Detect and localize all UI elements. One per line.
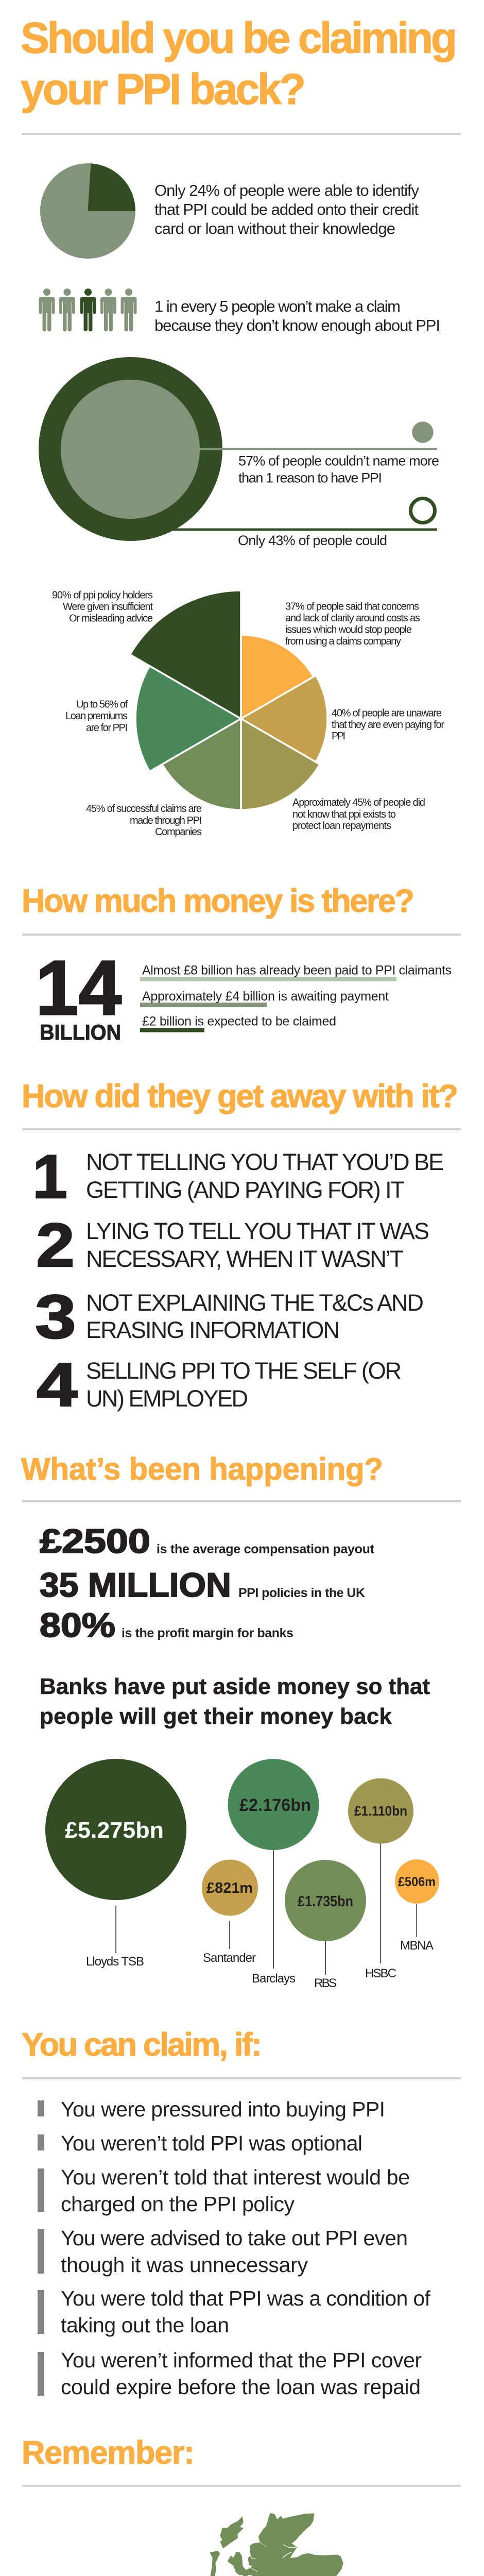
figure: 80%: 80% [40, 1606, 115, 1644]
label: approximately 45%: Approximately 45% of people did [292, 797, 425, 808]
item 4 [37, 1350, 402, 1419]
pie chart: 24% [40, 163, 135, 259]
rose chart [130, 590, 327, 810]
label: 37%: and lack of clarity around costs as [285, 613, 420, 624]
bar: £8 billion: Almost £8 billion has already been paid to PPI claimants [142, 963, 452, 978]
label: 37% [285, 601, 420, 647]
text: 1 in every 5: 1 in every 5 people won’t make a claim [154, 297, 401, 315]
heading: how did they get away: How did they get away with it? [22, 1078, 458, 1114]
text: only 24%: card or loan without their knowledge [154, 219, 395, 238]
bubble chart: bank provisions [45, 1759, 439, 1990]
bubble: HSBC [348, 1778, 413, 1980]
figure: 80%: is the profit margin for banks [122, 1626, 293, 1640]
bubble: Santander: £821m [206, 1880, 253, 1896]
bubble: Barclays: Barclays [252, 1972, 296, 1986]
item 4: UN) EMPLOYED [86, 1385, 248, 1412]
claim item 4 [38, 2226, 408, 2277]
label: 40%: PPI [332, 731, 345, 742]
text: 43%: Only 43% of people could [238, 533, 387, 548]
claim item 3: charged on the PPI policy [61, 2192, 295, 2216]
text: 57%: than 1 reason to have PPI [238, 470, 382, 485]
claim item 6 [38, 2348, 422, 2399]
text: 57%: 57% of people couldn’t name more [238, 453, 439, 469]
label: 40% [332, 708, 444, 742]
heading: what's been happening: What’s been happening? [21, 1452, 383, 1486]
chart: nested circles 57% and 43% [39, 357, 437, 541]
label: 90%: 90% of ppi policy holders [52, 589, 153, 601]
bubble: Barclays [228, 1759, 319, 1986]
label: 90%: Were given insufficient [63, 601, 153, 613]
bubble: Barclays: £2.176bn [239, 1795, 311, 1815]
item 1: 1 [32, 1142, 67, 1211]
title: Should you be claiming [21, 13, 457, 62]
item 3: ERASING INFORMATION [86, 1317, 340, 1343]
label: 56% [65, 699, 128, 734]
key figures [40, 1522, 375, 1644]
bar: £4 billion: Approximately £4 billion is awaiting payment [142, 989, 389, 1004]
claim item 3 [38, 2165, 410, 2216]
subheading: banks: people will get their money back [40, 1704, 392, 1729]
claim item 4: You were advised to take out PPI even [61, 2226, 408, 2250]
label: 45% of claims: Companies [155, 826, 202, 838]
label: approximately 45% [292, 797, 425, 832]
label: 40%: 40% of people are unaware [332, 708, 442, 719]
label: 37%: issues which would stop people [285, 624, 412, 636]
bubble: MBNA [395, 1859, 439, 1953]
subheading: banks: Banks have put aside money so that [40, 1674, 430, 1699]
bubble: MBNA: £506m [398, 1875, 436, 1889]
item 1: GETTING (AND PAYING FOR) IT [86, 1177, 405, 1203]
claim item 6: You weren’t informed that the PPI cover [61, 2348, 422, 2372]
bubble: Lloyds TSB [45, 1759, 186, 1969]
bar: £2 billion: £2 billion is expected to be claimed [142, 1014, 336, 1028]
map: United Kingdom with highlighted band [210, 2513, 343, 2576]
label: 90% [52, 589, 153, 624]
bubble: Santander [202, 1860, 258, 1965]
heading: how much money: How much money is there? [22, 883, 414, 919]
heading: remember: Remember: [22, 2435, 195, 2471]
item 2: NECESSARY, WHEN IT WASN’T [86, 1246, 404, 1272]
claim item 1: You were pressured into buying PPI [61, 2097, 385, 2121]
claim item 5: You were told that PPI was a condition of [61, 2286, 431, 2310]
label: 37%: from using a claims company [285, 636, 401, 647]
bubble: RBS: £1.735bn [298, 1893, 353, 1910]
item 2 [36, 1211, 429, 1280]
figure: 80% [40, 1606, 293, 1644]
claim item 6: could expire before the loan was repaid [61, 2375, 421, 2399]
subheading: banks [40, 1674, 430, 1729]
icon: five people, one highlighted [39, 289, 137, 331]
label: 56%: are for PPI [86, 722, 128, 734]
claim item 5: taking out the loan [61, 2313, 229, 2337]
bubble: Lloyds TSB: Lloyds TSB [86, 1955, 144, 1969]
heading: you can claim: You can claim, if: [22, 2027, 262, 2063]
text: only 24% [154, 181, 419, 238]
item 1: NOT TELLING YOU THAT YOU’D BE [86, 1149, 444, 1175]
label: 56%: Up to 56% of [76, 699, 128, 710]
panel: awareness statistics [39, 163, 440, 548]
label: 45% of claims: 45% of successful claims are [86, 803, 202, 815]
item 2: LYING TO TELL YOU THAT IT WAS [86, 1218, 429, 1244]
label: 45% of claims: made through PPI [130, 815, 202, 826]
bubble: HSBC: £1.110bn [354, 1803, 407, 1819]
label: 56%: Loan premiums [65, 710, 128, 722]
bubble: MBNA: MBNA [400, 1939, 434, 1953]
figure: 35 million: 35 MILLION [40, 1566, 231, 1604]
text: 1 in every 5 [154, 297, 440, 334]
title [21, 13, 457, 113]
item 4: SELLING PPI TO THE SELF (OR [86, 1358, 402, 1384]
text: only 24%: Only 24% of people were able to identify [154, 181, 419, 199]
item 1 [32, 1142, 444, 1211]
label: 37%: 37% of people said that concerns [285, 601, 419, 612]
item 3 [35, 1282, 424, 1351]
text: 57% [238, 453, 439, 485]
figure: £2500: is the average compensation payout [157, 1542, 375, 1556]
label: approximately 45%: not know that ppi exists to [292, 809, 396, 820]
bubble: RBS: RBS [314, 1976, 337, 1990]
bubble: HSBC: HSBC [365, 1967, 396, 1980]
claim item 5 [38, 2286, 431, 2337]
big number: 14 [36, 944, 122, 1031]
text: 1 in every 5: because they don’t know enough about PPI [154, 316, 440, 334]
claim item 4: though it was unnecessary [61, 2253, 308, 2277]
bubble: Lloyds TSB: £5.275bn [65, 1818, 164, 1843]
item 3: NOT EXPLAINING THE T&Cs AND [86, 1290, 424, 1316]
title: your PPI back? [21, 65, 306, 113]
panel: 14 billion [36, 944, 452, 1044]
rose chart labels [52, 589, 444, 838]
claim item 3: You weren’t told that interest would be [61, 2165, 410, 2189]
figure: 35 million [40, 1566, 365, 1604]
numbered list [32, 1142, 444, 1419]
figure: £2500: £2500 [40, 1522, 150, 1560]
item 3: 3 [35, 1282, 76, 1351]
figure: £2500 [40, 1522, 375, 1560]
label: 45% of claims [86, 803, 202, 838]
label: 90%: Or misleading advice [69, 613, 153, 624]
item 2: 2 [36, 1211, 75, 1280]
claim item 2: You weren’t told PPI was optional [61, 2131, 362, 2155]
bubble: Santander: Santander [203, 1951, 256, 1965]
big number: BILLION [40, 1020, 121, 1044]
item 4: 4 [37, 1350, 78, 1419]
figure: 35 million: PPI policies in the UK [238, 1586, 365, 1600]
claim list [38, 2097, 431, 2399]
label: 40%: that they are even paying for [332, 719, 444, 731]
bubble: RBS [285, 1860, 366, 1990]
label: approximately 45%: protect loan repayments [292, 820, 391, 832]
text: only 24%: that PPI could be added onto their credit [154, 200, 419, 218]
